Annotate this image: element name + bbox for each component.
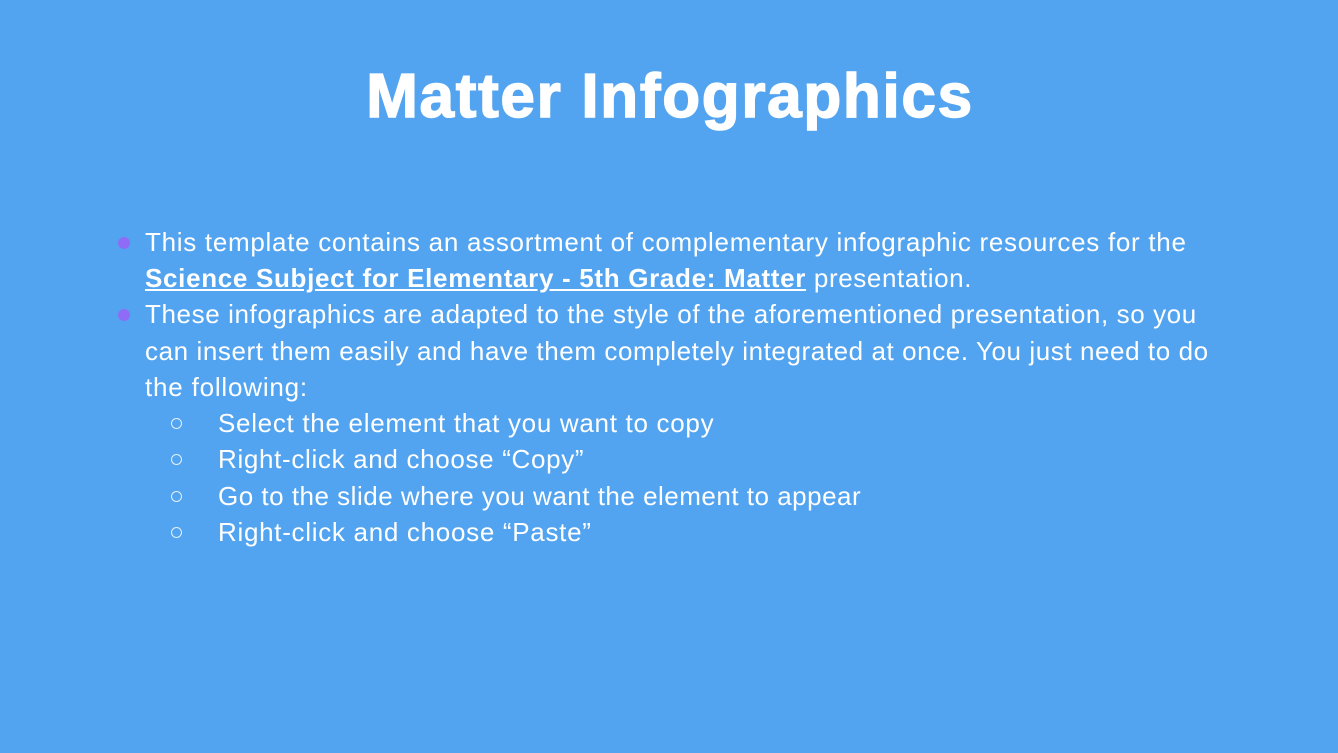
sub-item 2: Right-click and choose “Copy” bbox=[218, 444, 584, 474]
sub-bullet marker 4 bbox=[171, 527, 182, 538]
text: second bullet line 2: can insert them easily and have them completely integrated at once. You just need to do bbox=[145, 336, 1209, 366]
bullet: second bbox=[118, 309, 130, 321]
bullet list bbox=[118, 227, 1209, 547]
text: second bullet line 1: These infographics are adapted to the style of the aforementioned presentation, so you bbox=[145, 299, 1197, 329]
sub-item 3: Go to the slide where you want the element to appear bbox=[218, 481, 861, 511]
text: first bullet line 1: This template contains an assortment of complementary infographic resources for the bbox=[145, 227, 1187, 257]
sub-bullet marker 1 bbox=[171, 418, 182, 429]
sub-item 4: Right-click and choose “Paste” bbox=[218, 517, 592, 547]
sub-item 1: Select the element that you want to copy bbox=[218, 408, 714, 438]
text: second bullet line 3: the following: bbox=[145, 372, 308, 402]
sub-bullet marker 2 bbox=[171, 454, 182, 465]
sub-bullet marker 3 bbox=[171, 491, 182, 502]
bullet: first bbox=[118, 237, 130, 249]
title: Matter Infographics bbox=[366, 62, 974, 131]
text: first bullet line 2: Science Subject for Elementary - 5th Grade: Matter presentation. bbox=[145, 263, 972, 293]
